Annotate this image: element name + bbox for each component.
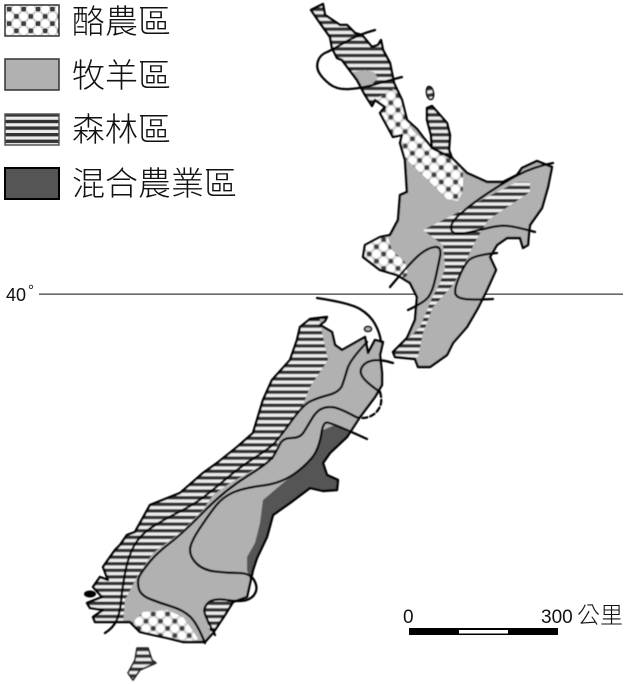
North Island forest: central diagonal (393, 182, 530, 360)
legend swatch: mixed farming (5, 168, 59, 199)
legend swatch: forest (5, 114, 59, 145)
legend label: forest: 森林區 (72, 111, 171, 148)
scale bar (403, 602, 623, 635)
legend label: dairy: 酪農區 (72, 3, 171, 40)
map: North Island (309, 2, 555, 370)
scale bar: 300 (541, 607, 573, 628)
map: South Island (80, 298, 400, 680)
black dot island (84, 590, 96, 598)
scale segments (409, 628, 558, 635)
North Island forest: Northland (312, 5, 398, 104)
Stewart Island (128, 648, 156, 680)
legend swatch: pasture (5, 59, 59, 90)
boundary lines: North Island (317, 30, 553, 310)
North Island dairy: Waikato (375, 88, 463, 201)
South Island dairy: Southland (132, 610, 198, 642)
North Island dairy: Taranaki (363, 236, 408, 278)
latitude line 40 degrees: ° (28, 282, 34, 299)
legend label: pasture: 牧羊區 (72, 57, 171, 94)
South Island forest: west coast (88, 318, 328, 622)
Coromandel peninsula (427, 106, 452, 158)
South Island mixed farming (247, 425, 350, 580)
South Island coast (87, 317, 383, 642)
latitude line 40 degrees (6, 282, 623, 305)
small island: D'Urville (364, 326, 372, 332)
North Island pasture base (312, 5, 552, 367)
North Island pasture patch (353, 70, 378, 87)
small island: Great Barrier (425, 86, 435, 100)
South Island forest: southeast (203, 600, 232, 634)
latitude line 40 degrees: 40 (6, 285, 26, 305)
legend (5, 3, 237, 202)
scale labels: 0 (403, 607, 414, 628)
boundary lines: South Island (105, 298, 393, 643)
North Island coast (311, 4, 552, 367)
scale bar: 公里 (577, 602, 623, 628)
legend label: mixed farming: 混合農業區 (72, 165, 237, 202)
legend swatch: dairy (5, 5, 59, 36)
